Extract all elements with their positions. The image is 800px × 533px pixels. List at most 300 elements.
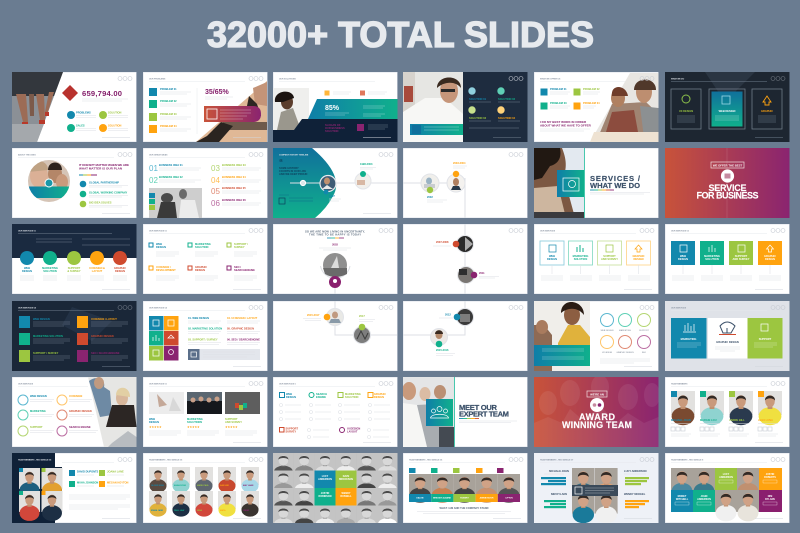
circular icon — [721, 169, 734, 183]
note box — [188, 349, 260, 360]
box labels: MARKETING — [573, 254, 588, 258]
orange tile: ROBERTS — [764, 476, 776, 479]
bar names: JENNIE MOOR — [479, 498, 494, 500]
six outlined circles — [600, 314, 650, 348]
box labels: GRAPHIC — [633, 254, 645, 258]
teal caption strip — [410, 124, 463, 135]
four portraits — [19, 468, 62, 521]
teal tile: ROBINSON — [319, 495, 332, 498]
slide: team strip: TEAM MEMBERS - RECTANGLE 06 — [409, 458, 443, 462]
slide: five services dark top — [12, 224, 136, 294]
slide: team strip — [403, 453, 528, 523]
slide: our solutions — [273, 72, 398, 142]
service labels: LAYOUT — [92, 269, 103, 273]
item labels: BUSINESS IDEA 04 — [222, 175, 246, 179]
four icons and labels: MARKETING — [345, 392, 361, 396]
colour stripe — [590, 190, 650, 194]
box labels: DESIGN — [634, 257, 644, 261]
benefit labels — [469, 97, 520, 128]
slide: six service list: OUR SERVICES 01 — [149, 230, 168, 232]
member labels: DAVID DUPONTS — [77, 470, 99, 474]
colour squares — [69, 470, 105, 487]
portrait row four — [273, 506, 398, 530]
heading: IT DOESN'T MATTER WHEN WE ARE — [79, 163, 129, 167]
four feature circles — [67, 111, 107, 132]
bottom three services: SEARCHENGINE — [234, 268, 255, 272]
slide: service grid: OUR SERVICES 04 — [149, 306, 168, 310]
section heading — [459, 403, 509, 418]
service labels: UI DESIGN / LAYOUT — [91, 317, 117, 321]
top three services: SURVEY — [234, 245, 245, 249]
green tile: BROOKSON — [339, 478, 353, 481]
bottom icons: LAYOUT — [347, 430, 358, 434]
section heading: MEET OUR — [459, 403, 498, 412]
orange label: 2015-2017 — [307, 313, 320, 317]
slide headline — [562, 412, 632, 430]
four icons and labels: DESIGN — [286, 395, 296, 399]
red year label: 2007-2008 — [436, 240, 449, 244]
problem labels — [160, 87, 191, 131]
filled boxes — [671, 241, 782, 265]
photo: women — [534, 301, 590, 371]
slide: what we offer — [534, 72, 658, 142]
node two — [447, 171, 465, 192]
section heading: EXPERT TEAM — [459, 410, 509, 418]
top three services: SOLUTION — [195, 245, 209, 249]
slide: timeline end — [403, 301, 528, 371]
offer labels: PROBLEM 02 — [583, 87, 600, 91]
green tile: LUCY — [723, 473, 730, 476]
photo: hands — [149, 392, 184, 414]
slide: team four profiles — [665, 377, 790, 447]
orange tile — [759, 468, 782, 490]
lower left note — [279, 195, 313, 204]
slide: numbered list: OUR GREAT IDEAS — [149, 154, 168, 156]
circle labels: UI DESIGN — [69, 394, 82, 398]
portraits row two — [149, 491, 259, 517]
circle labels: MARKETING — [30, 409, 46, 413]
portrait node one — [324, 308, 344, 326]
slide: team colour mosaic: TEAM MEMBERS - RECTANGLE 8 — [671, 458, 704, 462]
member labels: JOANA LANE — [107, 470, 124, 474]
slide: team with skill bars: TEAM MEMBERS - RECTANGLE 07 — [540, 458, 574, 462]
four portraits — [671, 391, 782, 425]
bullet labels: BIG IDEA SOLVES — [89, 200, 112, 204]
slide: services checklists — [273, 377, 398, 447]
teal accent line — [584, 148, 585, 218]
slide: company history timeline start: COMPANY HISTORY TIMELINE — [279, 154, 309, 156]
purple tile — [759, 490, 782, 512]
slide headline: AWARD — [579, 412, 616, 422]
blue tile: ANDERSON — [318, 478, 332, 481]
numbered items: 02 — [149, 176, 158, 185]
slide: three panel grey: OUR SERVICES — [671, 308, 687, 310]
numbered items: 03 — [211, 164, 220, 173]
slide: our solutions: OUR SOLUTIONS — [279, 78, 296, 80]
service labels: UI DESIGN & — [89, 266, 105, 270]
bottom three services: DESIGN — [195, 268, 205, 272]
blue tile — [314, 470, 336, 488]
slide: service grid — [143, 301, 268, 371]
portrait tags — [19, 468, 46, 495]
list labels: 03. SUPPORT / SURVEY — [188, 338, 218, 342]
item labels — [159, 163, 261, 205]
bar names — [416, 496, 513, 500]
dark quote band — [572, 485, 618, 496]
caption: WHAT I AM AND THE COMPANY STAND — [439, 506, 489, 510]
timeline path — [403, 178, 465, 218]
box labels: AND SURVEY — [601, 257, 618, 261]
slide: two women and circles — [534, 301, 658, 371]
service labels: DESIGN — [22, 269, 32, 273]
left skills: NIM DYLANS — [551, 492, 567, 496]
lower year label: 1997 — [329, 194, 335, 198]
slide: outlined service boxes: OUR SERVICES — [540, 230, 556, 232]
navy band — [273, 119, 398, 142]
offer labels: PROBLEM 01 — [550, 87, 567, 91]
numbered items — [149, 164, 220, 208]
timeline path — [403, 301, 465, 335]
names — [671, 418, 778, 424]
names row one: MARK PAUL — [197, 484, 210, 487]
circular icon — [590, 398, 604, 412]
box labels: DESIGN — [678, 257, 688, 261]
meeting photo — [149, 188, 202, 218]
circle labels: WEB DESIGN — [601, 330, 614, 332]
slide: meet our expert team — [402, 377, 528, 447]
feature labels: SOLUTION — [108, 124, 122, 128]
slide: numbered list — [143, 148, 268, 218]
slide headline: FOR BUSINESS — [696, 190, 758, 200]
names row two: MAYA — [220, 509, 226, 512]
service labels: & SURVEY — [67, 269, 81, 273]
right outline card: GRAPHIC — [761, 109, 773, 113]
box icons — [549, 245, 642, 252]
blue tile — [671, 490, 693, 512]
circle labels: GRAPHIC DESIGN — [69, 409, 92, 413]
bottom three services — [149, 265, 257, 280]
slide: service for business — [665, 148, 790, 218]
slide: timeline junction — [273, 301, 398, 371]
slide headline — [696, 183, 758, 200]
purple year label: 2011 — [479, 271, 485, 275]
timeline line — [290, 182, 398, 184]
portrait tags — [671, 391, 764, 397]
purple statement — [540, 120, 592, 131]
names: ALEX LUNA — [758, 418, 773, 422]
names row two: NINA — [197, 509, 202, 512]
names row two: PAUL LAW — [174, 509, 184, 512]
green tile: DAVE — [343, 475, 350, 478]
benefit labels: SOLUTION 04 — [498, 116, 516, 120]
star ratings: ★★★★★ — [187, 425, 200, 429]
slide: company history timeline start — [273, 148, 398, 218]
names row one: SAM LEE — [220, 484, 230, 487]
problem labels: PROBLEM 04 — [160, 124, 177, 128]
section heading: WHAT WE DO — [590, 181, 640, 190]
teal tile: JOHN — [701, 495, 708, 498]
slide: filled service boxes: OUR SERVICES 03 — [671, 230, 690, 232]
offer labels: PROBLEM 03 — [550, 101, 567, 105]
green tile — [336, 470, 356, 488]
slide: ten portraits: TEAM MEMBERS - RECTANGLE 05 — [149, 458, 183, 462]
bar names: LIPTON — [505, 498, 513, 500]
photo: colour blocks — [225, 392, 260, 414]
quote text: AND WE KEEP PROUD — [279, 172, 307, 176]
slide: timeline continues — [403, 148, 528, 218]
slide: our problems — [143, 72, 268, 142]
service labels: SEO / SEARCHENGINE — [91, 351, 120, 355]
captions: DESIGN — [149, 420, 159, 424]
top three services: DESIGN — [156, 245, 166, 249]
star ratings — [149, 425, 238, 429]
star ratings: ★★★★★ — [225, 425, 238, 429]
member labels: MUHA JOHNSON — [77, 480, 98, 484]
colour stripe — [459, 418, 517, 422]
slide: team navy panel — [12, 453, 136, 523]
service labels: SUPPORT / SURVEY — [33, 351, 59, 355]
four icons and labels: DESIGN — [374, 395, 384, 399]
second node — [458, 266, 477, 284]
dark node — [453, 236, 474, 252]
portrait grid — [572, 468, 618, 523]
small top icons — [324, 90, 387, 96]
slide: six service list — [143, 224, 268, 294]
arrow badge — [62, 85, 78, 101]
bottom three services: DEVELOPMENT — [156, 268, 176, 272]
photo: team — [402, 377, 454, 447]
names row one: ANNA ROSE — [174, 484, 187, 487]
purple tile: DYLANS — [765, 498, 775, 501]
purple statement: ABOUT WHAT WE HAVE TO OFFER — [540, 124, 592, 128]
six outlined circles — [18, 395, 67, 436]
bar names: DALVIE — [416, 496, 424, 500]
colour name bars — [409, 494, 520, 502]
green support panel: SUPPORT — [759, 337, 772, 341]
centre badge — [45, 179, 53, 187]
star ratings: ★★★★★ — [149, 425, 162, 429]
captions: WEB — [149, 417, 155, 421]
box labels: DESIGN — [547, 257, 557, 261]
names row one: AMY LANE — [243, 484, 254, 487]
service labels — [20, 266, 127, 280]
slide: circles with photo: OUR SERVICES — [18, 384, 34, 386]
slide: award winning team — [534, 375, 660, 447]
white centre panel: GRAPHIC DESIGN — [716, 340, 739, 344]
purple statement: I DO MY BEST WORK IN ORDER — [540, 120, 587, 124]
teal icon box — [557, 170, 584, 197]
slide: circle photo with teal band: ABOUT THE USES — [18, 154, 36, 156]
four icons and labels: WEB — [286, 392, 292, 396]
percentage: 85% — [325, 105, 340, 112]
circle labels — [601, 329, 650, 354]
faded people — [534, 375, 660, 447]
feature labels — [76, 110, 128, 130]
portrait strip — [409, 474, 520, 503]
box labels: SUPPORT — [735, 254, 748, 258]
slide: what we do dark: WHAT WE DO — [671, 78, 685, 80]
box labels — [678, 254, 776, 261]
four icons and labels: SOLUTION — [345, 395, 359, 399]
social circles — [671, 427, 772, 431]
teal tile — [314, 488, 336, 506]
teal overlay strip — [534, 345, 590, 366]
list labels: 01. WEB DESIGN — [188, 316, 209, 320]
portraits row one — [149, 467, 259, 493]
bar names: ROBERT — [460, 498, 469, 500]
problem labels: PROBLEM 02 — [160, 99, 177, 103]
feature labels: SOLUTION — [108, 110, 122, 114]
list labels: 02. MARKETING SOLUTION — [188, 326, 222, 330]
captions: SUPPORT — [225, 417, 238, 421]
captions: MARKETING — [187, 417, 203, 421]
item labels: BUSINESS IDEA 01 — [159, 163, 183, 167]
slide: dark six services: OUR SERVICES 04 — [18, 306, 37, 310]
box labels: GRAPHIC — [764, 254, 776, 258]
dark node — [454, 308, 474, 326]
item labels: BUSINESS IDEA 06 — [222, 198, 246, 202]
slide: circle photo with teal band — [12, 148, 136, 218]
names row two: OMAR — [243, 509, 250, 512]
problem labels: PROBLEM 03 — [160, 112, 177, 116]
slide: circles with photo — [12, 377, 136, 447]
slide: team navy panel: TEAM MEMBERS - RECTANGLE 03 — [18, 458, 52, 462]
quote text — [279, 158, 307, 176]
captions — [149, 417, 242, 424]
box labels: AND SURVEY — [733, 257, 750, 261]
box labels: SOLUTION — [705, 257, 719, 261]
teal tile — [693, 490, 715, 512]
list labels: 04. UI DESIGN / LAYOUT — [227, 316, 258, 320]
member labels: MEGAN HOYTON — [107, 480, 129, 484]
slide: team four profiles: TEAM MEMBERS — [671, 382, 688, 386]
three bullet circles — [80, 181, 86, 207]
navy panel — [463, 72, 528, 142]
timeline path — [335, 301, 398, 335]
four benefit circles — [468, 87, 505, 114]
tag label: WE'RE AN — [590, 392, 604, 396]
quote text: SOME HISTORY — [279, 166, 299, 170]
blue tile: MONET — [678, 495, 687, 498]
item labels: BUSINESS IDEA 03 — [222, 163, 246, 167]
green label: 2017 — [359, 314, 365, 318]
tags — [409, 468, 504, 473]
percentage: 35/65% — [205, 89, 230, 96]
bar names: BRIDGET ALBANE — [433, 496, 452, 500]
slide headline: SERVICE — [708, 183, 746, 193]
slide: dark six services — [12, 301, 136, 371]
start node — [300, 180, 306, 186]
portrait row two — [273, 470, 398, 495]
blue marketing panel: MARKETING — [681, 337, 696, 341]
bottom icons: UI DESIGN — [347, 426, 360, 430]
purple caption: SOLUTION — [325, 129, 339, 133]
box labels: DESIGN — [765, 257, 775, 261]
photo: runners — [12, 72, 63, 142]
node one — [421, 174, 439, 192]
centred heading: THE TIME TO BE HAPPY IS TODAY — [309, 232, 361, 236]
purple caption — [325, 124, 388, 132]
bullet labels: GLOBAL WORKING COMPANY — [89, 190, 128, 194]
benefit labels: SOLUTION 03 — [469, 116, 487, 120]
names row one: OLIVER KING — [151, 485, 164, 487]
circle family photo — [28, 160, 70, 202]
purple caption: SLOGAN OF — [325, 123, 341, 127]
top three services: WEB — [156, 242, 162, 246]
teal accent line — [454, 377, 455, 447]
circle labels — [30, 394, 98, 432]
left skills — [541, 469, 569, 508]
problem labels: PROBLEM 01 — [160, 87, 177, 91]
circle labels: GRAPHIC DESIGN — [616, 351, 634, 354]
top three services: SUPPORT / — [234, 242, 248, 246]
photo: hand and wood — [196, 81, 267, 142]
offer labels: PROBLEM 04 — [583, 101, 600, 105]
slide: three panel grey — [665, 301, 790, 371]
teal tile: JUSTIN — [321, 492, 330, 495]
slide: filled service boxes — [665, 224, 790, 294]
portrait row one — [273, 453, 398, 477]
six service squares — [19, 316, 88, 362]
big number: 659,794.00 — [82, 89, 122, 98]
green tile: ANDERSON — [719, 476, 733, 479]
grey photo circle — [320, 253, 350, 278]
right skills: LUCY ANDERSON — [624, 469, 647, 473]
numbered items: 01 — [149, 164, 158, 173]
orange tile: JUSTIN — [766, 473, 775, 476]
orange tile — [336, 488, 356, 506]
top three services: MARKETING — [195, 242, 211, 246]
bottom three services: GRAPHIC — [195, 265, 207, 269]
blue tile: WITCHELL — [676, 498, 689, 501]
bottom icons — [280, 426, 360, 434]
second node — [355, 171, 371, 189]
outlined boxes — [540, 241, 650, 265]
circle labels: SUPPORT — [30, 425, 43, 429]
quote text: “ — [279, 158, 283, 167]
slide: services checklists: OUR SERVICES 5 — [279, 384, 297, 386]
photo: woman at desk — [273, 88, 309, 130]
item labels: BUSINESS IDEA 02 — [159, 175, 183, 179]
four icons — [540, 88, 580, 110]
bottom icons: SURVEY — [286, 430, 296, 434]
names row two: EMMA JANE — [151, 509, 164, 512]
names row two — [151, 509, 250, 512]
slide: three photos — [143, 377, 268, 447]
box labels: SUPPORT — [603, 254, 616, 258]
box icons — [680, 245, 774, 252]
service labels: SUPPORT — [68, 266, 81, 270]
orange tile: RUSSELL — [340, 495, 352, 498]
timeline line — [464, 224, 466, 294]
photo: man in white shirt — [403, 72, 463, 142]
box labels: MARKETING — [704, 254, 720, 258]
numbered items: 04 — [211, 176, 220, 185]
names: MICHAEL JOHN — [671, 418, 691, 422]
slide: timeline vertical — [403, 224, 528, 294]
left skills: MICHALE JOHN — [549, 469, 569, 473]
box labels: WEB — [549, 254, 555, 258]
team icon box — [426, 399, 453, 426]
side mini icons — [149, 193, 155, 210]
teal tile: ANDERSON — [697, 498, 711, 501]
colour stripe — [327, 237, 344, 239]
member labels — [69, 470, 130, 509]
slide: grayscale portrait wall — [273, 453, 398, 530]
slide: revenue figure with runners photo — [12, 72, 136, 142]
service labels: GRAPHIC DESIGN — [91, 334, 114, 338]
navy top — [12, 224, 136, 258]
